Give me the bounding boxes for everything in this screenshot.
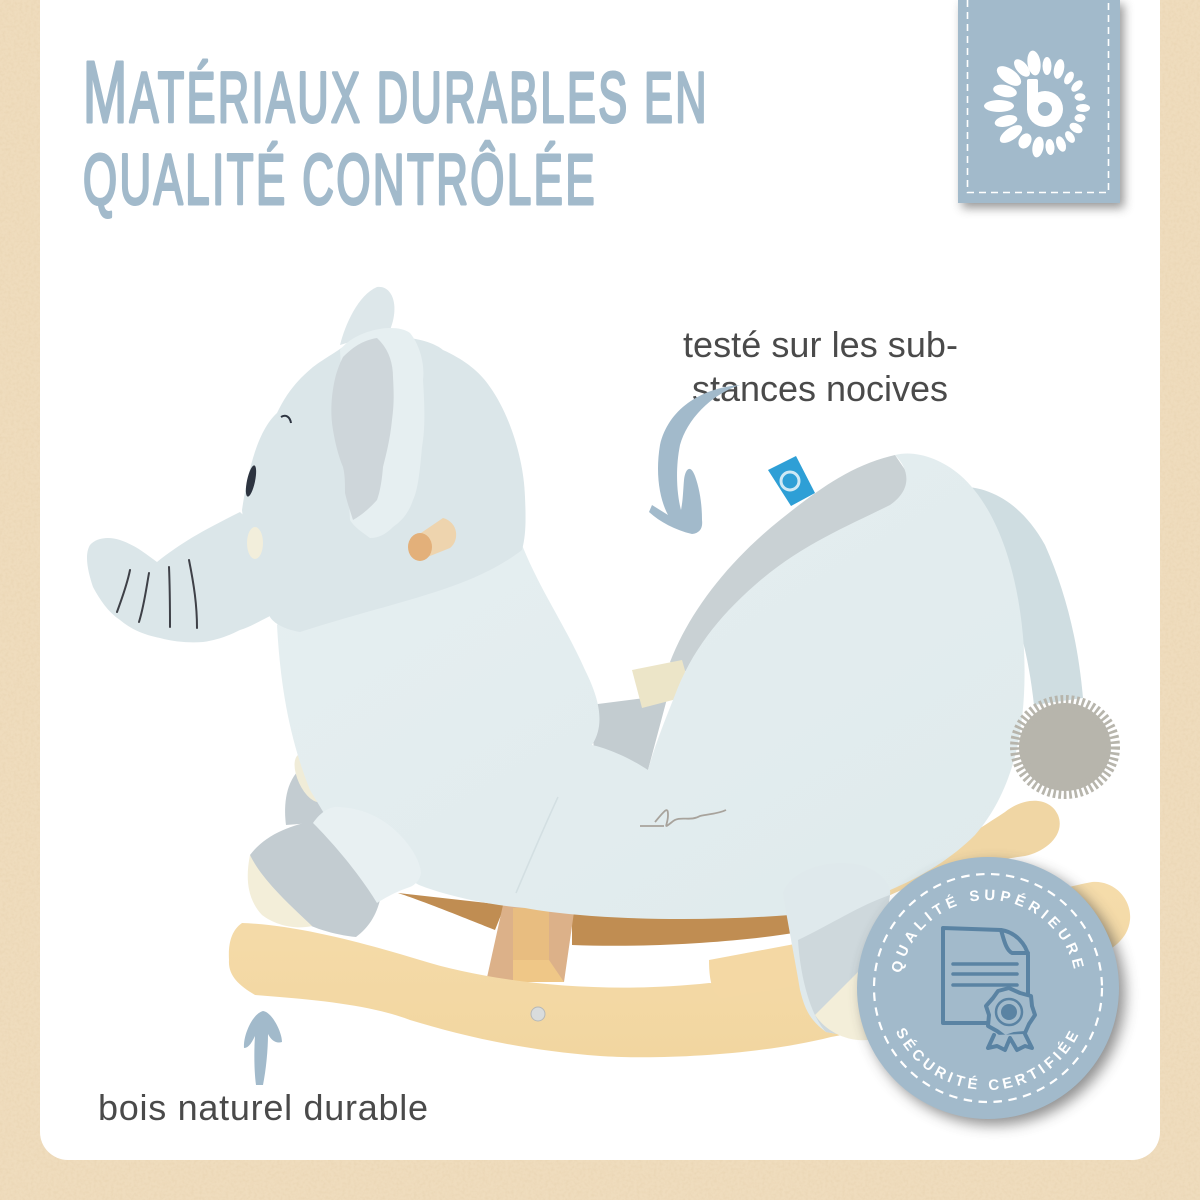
trunk bbox=[87, 512, 290, 642]
trunk stripes bbox=[117, 560, 197, 628]
body seam bbox=[516, 797, 558, 893]
seat back inner bbox=[670, 455, 912, 680]
label: durable natural wood: bois naturel durable bbox=[98, 1087, 428, 1128]
ear bbox=[340, 328, 424, 538]
pompom bbox=[1018, 703, 1112, 791]
tag bbox=[768, 456, 815, 506]
title: MATÉRIAUX DURABLES EN bbox=[83, 44, 709, 141]
wooden posts bbox=[486, 905, 575, 982]
hind leg bbox=[783, 863, 890, 1040]
title bbox=[83, 44, 709, 220]
icon: certificate bbox=[943, 928, 1035, 1050]
badge text bottom: SÉCURITÉ CERTIFIÉE bbox=[896, 1028, 1078, 1090]
far ear bbox=[340, 287, 394, 345]
seat bottom bbox=[590, 695, 668, 772]
eyebrow bbox=[281, 416, 291, 423]
back front leg bbox=[285, 770, 325, 825]
far rocker underside bbox=[398, 893, 800, 946]
body bbox=[277, 454, 1025, 919]
belt bbox=[632, 660, 692, 708]
foot rest bbox=[709, 943, 800, 998]
icon: sunflower b logo bbox=[984, 50, 1090, 158]
peg bbox=[408, 518, 456, 561]
far rocker right end bbox=[880, 801, 1060, 900]
eye bbox=[244, 465, 258, 497]
ear inner bbox=[331, 338, 394, 520]
cheek button bbox=[247, 527, 263, 559]
tail bbox=[948, 486, 1083, 705]
badge: quality seal bbox=[854, 854, 1134, 1134]
label: tested for harmful substances bbox=[683, 324, 958, 409]
product: rocking elephant bbox=[87, 287, 1130, 1057]
label: tested for harmful substances: testé sur les sub- bbox=[683, 324, 958, 365]
label: tested for harmful substances: stances nocives bbox=[692, 368, 948, 409]
arrow: curved down to toy bbox=[649, 385, 740, 534]
front leg bbox=[248, 807, 421, 937]
arrow: up to wood bbox=[244, 1011, 282, 1085]
head bbox=[242, 337, 526, 632]
screw bbox=[531, 1007, 545, 1021]
badge text top: QUALITÉ SUPÉRIEURE bbox=[892, 890, 1084, 972]
embroidered signature bbox=[640, 810, 726, 826]
title: QUALITÉ CONTRÔLÉE bbox=[83, 141, 597, 220]
logo label bbox=[958, 0, 1124, 208]
near rocker bbox=[229, 882, 1130, 1057]
